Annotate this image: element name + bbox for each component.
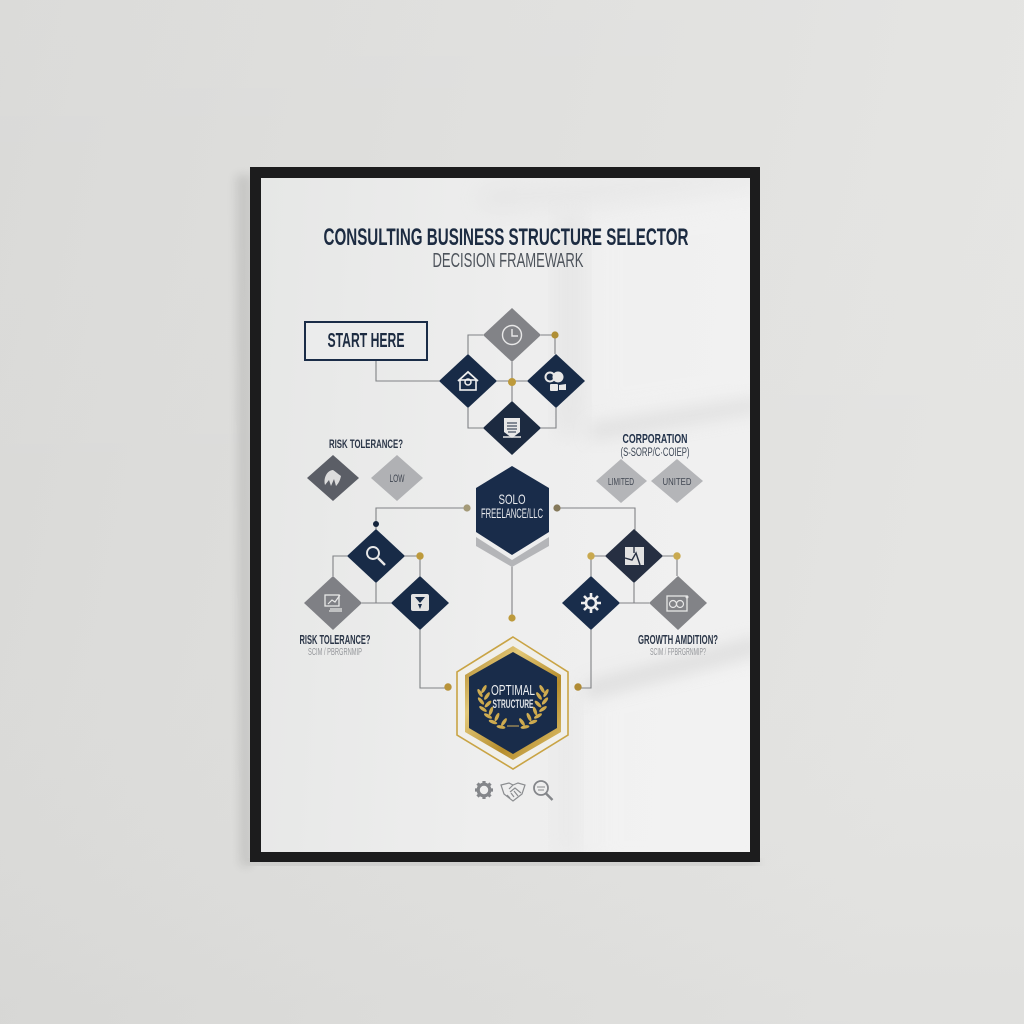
icon: handshake [501, 783, 525, 801]
title: CONSULTING BUSINESS STRUCTURE SELECTOR [324, 224, 688, 251]
risk diamond: low [371, 455, 423, 501]
connectors: middle and lower tiers [333, 508, 677, 688]
label: corporation: (S-SORP/C·COIEP) [620, 447, 690, 459]
label: risk tolerance lower: RISK TOLERANCE? [300, 633, 370, 647]
hexagon: solo freelance/llc: SOLO [498, 491, 526, 507]
diamond: monitor chart [304, 576, 362, 630]
hexagon: solo freelance/llc: FREELANCE/LLC [481, 505, 543, 521]
label: growth ambition: SCIM / FPBRGRNMIP? [650, 647, 706, 658]
connectors: top cluster [376, 335, 556, 428]
corporation diamond: limited right [651, 459, 703, 503]
decision diamond: clock [483, 308, 541, 362]
decision diamond: home [439, 354, 497, 408]
label: growth ambition: GROWTH AMDITION? [638, 633, 718, 647]
label: growth ambition [638, 633, 718, 658]
subtitle: DECISION FRAMEWARK [432, 250, 584, 272]
poster frame [250, 167, 770, 870]
badge: optimal structure: STRUCTURE [492, 699, 534, 711]
diamond: calendar shield [391, 576, 449, 630]
decision diamond: document [483, 401, 541, 455]
decision diamond: people and gears [527, 354, 585, 408]
risk diamond: icon [307, 455, 359, 501]
badge: optimal structure: OPTIMAL [491, 682, 535, 699]
icon: magnifier [534, 781, 552, 800]
label: corporation: CORPORATION [622, 431, 688, 446]
diamond: magnifier [347, 529, 405, 583]
laurel wreath [476, 684, 550, 729]
badge: optimal structure [457, 637, 568, 769]
label: risk tolerance lower [300, 633, 370, 658]
hexagon: solo freelance/llc [476, 466, 549, 567]
start here box [305, 322, 427, 360]
corporation diamond: limited left: LIMITED [608, 476, 634, 488]
label: risk tolerance top: RISK TOLERANCE? [329, 439, 403, 451]
diamond: split chart [605, 529, 663, 583]
start here box: START HERE [328, 330, 404, 352]
corporation diamond: limited left [596, 459, 647, 503]
label: risk tolerance lower: SCIM / PBRGRNMIP [308, 647, 362, 658]
diamond: gear [562, 576, 620, 630]
icon: gear [475, 781, 493, 799]
label: corporation [620, 431, 690, 459]
risk diamond: low: LOW [390, 473, 405, 485]
corporation diamond: limited right: UNITED [662, 476, 692, 488]
junction dots: top cluster [508, 331, 559, 386]
junction dots: middle and lower tiers [373, 504, 681, 691]
diamond: camera money [649, 576, 707, 630]
